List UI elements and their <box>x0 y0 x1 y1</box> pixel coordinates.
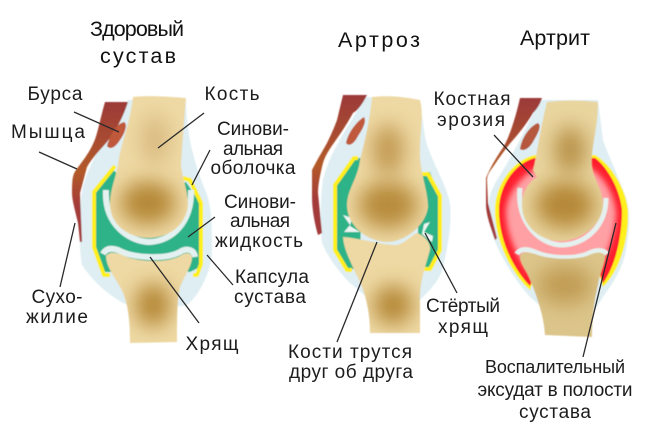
labels: arthritis <box>434 89 632 423</box>
labels: osteoarthritis: хрящ <box>438 317 488 338</box>
title: healthy joint <box>90 17 184 68</box>
labels: osteoarthritis: Кости трутся <box>288 342 412 363</box>
labels: healthy joint: Мышца <box>11 122 85 143</box>
panel: healthy joint <box>11 17 309 355</box>
labels: healthy joint: Бурса <box>28 84 83 105</box>
labels: osteoarthritis <box>288 296 500 383</box>
labels: healthy joint: Кость <box>204 84 260 105</box>
labels: healthy joint: оболочка <box>210 158 296 179</box>
title: arthritis: Артрит <box>520 26 590 50</box>
labels: osteoarthritis: друг об друга <box>289 362 413 383</box>
labels: healthy joint <box>11 84 309 355</box>
labels: healthy joint: альная <box>223 139 283 160</box>
title: healthy joint: Здоровый <box>90 17 184 41</box>
joint illustration: osteoarthritis <box>312 95 451 333</box>
labels: healthy joint: Сухо- <box>32 287 82 308</box>
leader lines: arthritis <box>494 135 616 357</box>
joint illustration: arthritis <box>486 98 629 337</box>
panel: arthritis joint <box>434 26 632 423</box>
labels: healthy joint: Синови- <box>217 119 289 140</box>
joint illustration: healthy <box>72 96 212 343</box>
leader lines: osteoarthritis <box>337 233 457 342</box>
labels: healthy joint: Капсула <box>235 267 309 288</box>
title: osteoarthritis: Артроз <box>338 28 420 52</box>
panel: osteoarthritis joint <box>288 28 500 383</box>
labels: arthritis: Воспалительный <box>485 357 625 377</box>
labels: healthy joint: сустава <box>234 287 306 308</box>
labels: healthy joint: жидкость <box>215 231 303 252</box>
title: healthy joint: сустав <box>100 44 176 68</box>
labels: osteoarthritis: Стёртый <box>426 296 500 317</box>
labels: arthritis: сустава <box>519 402 591 423</box>
labels: arthritis: Костная <box>434 89 510 110</box>
labels: healthy joint: Синови- <box>224 192 296 213</box>
labels: healthy joint: Хрящ <box>186 334 239 355</box>
labels: healthy joint: жилие <box>26 307 88 328</box>
labels: healthy joint: альная <box>230 211 290 232</box>
labels: arthritis: эрозия <box>437 110 505 131</box>
leader lines: healthy <box>39 112 233 323</box>
labels: arthritis: эксудат в полости <box>478 380 632 401</box>
